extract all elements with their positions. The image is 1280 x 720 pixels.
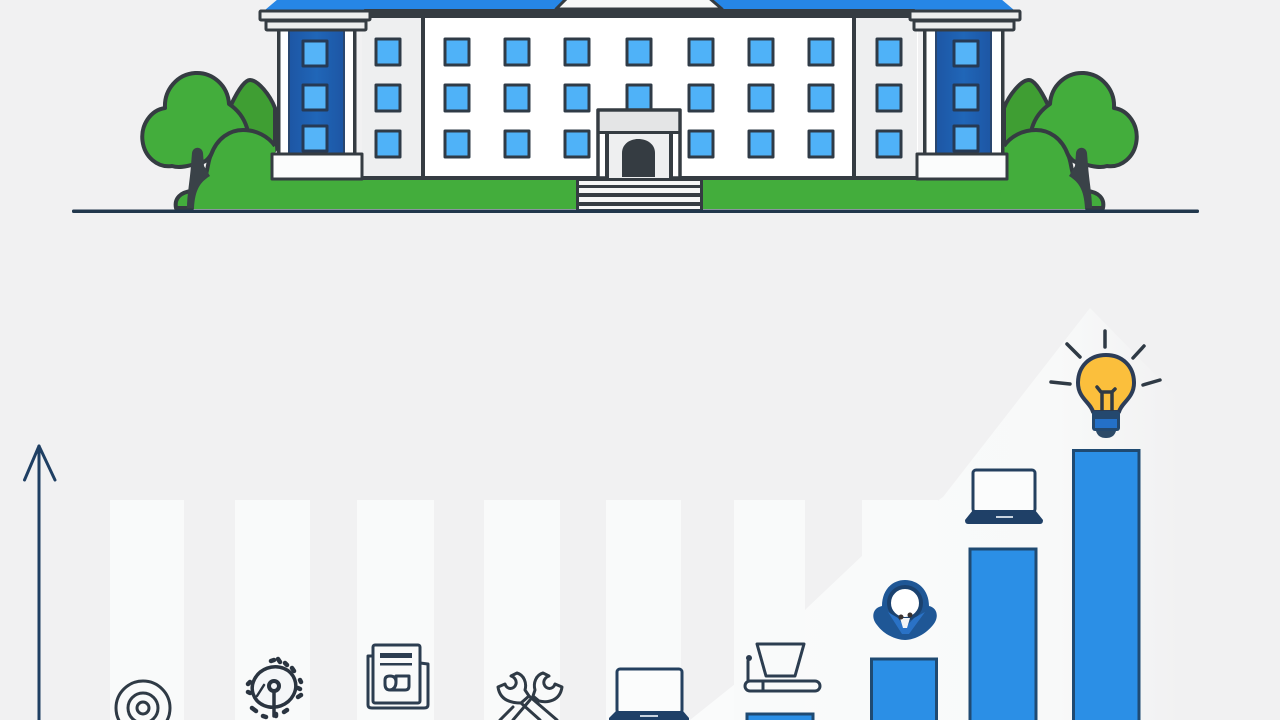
icon: ring figure — [873, 580, 937, 640]
icon: dial — [246, 659, 302, 717]
entrance porch — [598, 110, 680, 178]
arrow: vertical axis — [24, 446, 55, 720]
icon: funnel cup on stand — [745, 644, 820, 691]
icon: light bulb — [1051, 331, 1160, 438]
side wings — [362, 18, 423, 178]
central pediment — [556, 0, 722, 9]
icon: laptop — [609, 669, 689, 720]
facade outline — [350, 9, 930, 180]
ground hedge — [192, 178, 1088, 209]
building illustration — [72, 0, 1199, 213]
entrance steps — [576, 179, 703, 211]
left trees — [142, 73, 280, 208]
right trees — [999, 73, 1137, 208]
bar 3 — [970, 549, 1036, 720]
background: column strips — [110, 500, 938, 720]
bar 1 — [747, 714, 813, 720]
icon: laptop upper — [965, 470, 1043, 524]
ground line — [72, 210, 1199, 213]
left tower — [260, 0, 370, 179]
right tower — [910, 0, 1020, 179]
roof — [350, 0, 930, 11]
main facade — [362, 18, 918, 179]
icon: book — [368, 645, 428, 708]
icon: crossed tools — [498, 673, 562, 720]
door — [622, 139, 655, 177]
background: rising light wedge — [690, 308, 1180, 720]
bar 2 — [872, 659, 936, 720]
icon: target — [116, 681, 170, 720]
windows — [376, 39, 901, 157]
bar 4 — [1074, 450, 1139, 720]
